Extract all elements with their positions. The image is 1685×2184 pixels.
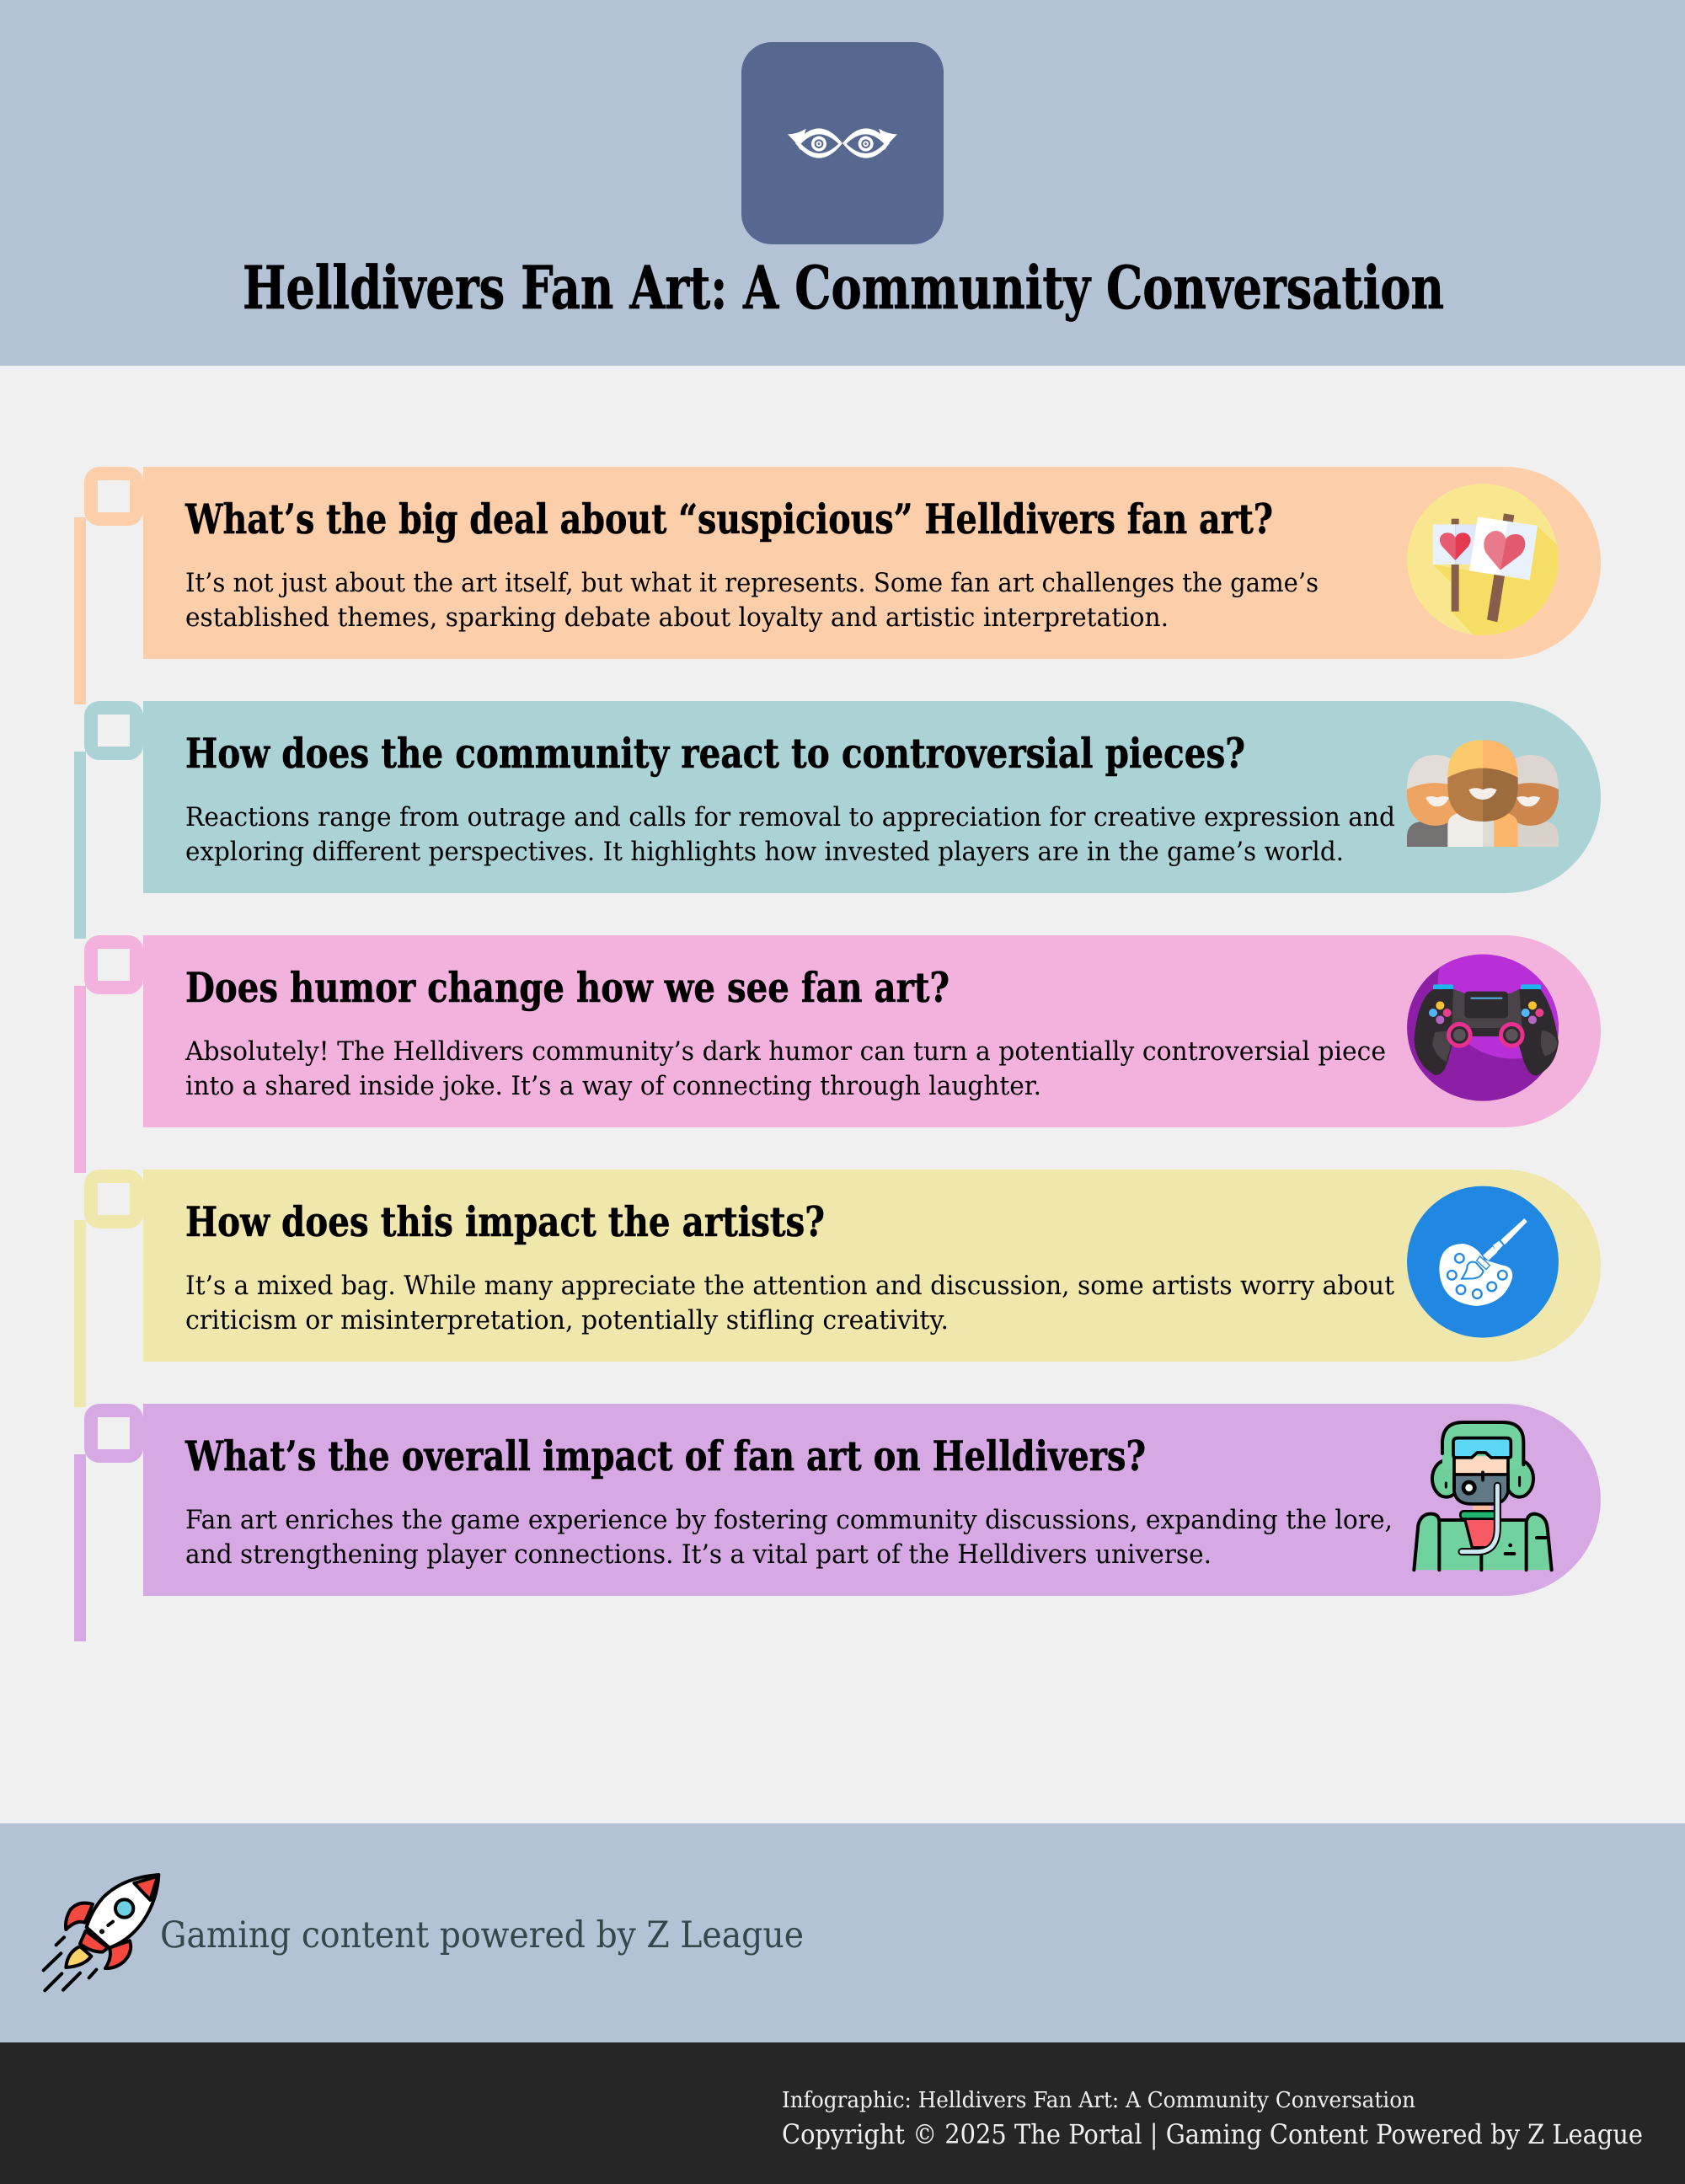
body text (185, 1505, 1393, 1570)
icon: paint palette and brush (1407, 1186, 1559, 1338)
panel: impact on artists (74, 1170, 1601, 1407)
infographic credit: Infographic: Helldivers Fan Art: A Community Conversation (782, 2088, 1415, 2113)
icon: group of people (1407, 740, 1559, 847)
body text: Reactions range from outrage and calls for removal to appreciation for creative expression and (185, 802, 1395, 832)
logo tile (741, 42, 944, 244)
body text: Absolutely! The Helldivers community’s dark humor can turn a potentially controversial piece (185, 1036, 1386, 1067)
body text: It’s not just about the art itself, but what it represents. Some fan art challenges the game’s (185, 568, 1319, 598)
icon: suspicious eyes (788, 128, 897, 158)
heading: What’s the overall impact of fan art on Helldivers? (185, 1432, 1146, 1480)
panel: overall impact (74, 1404, 1601, 1641)
body text: into a shared inside joke. It’s a way of connecting through laughter. (185, 1071, 1041, 1101)
header band (0, 0, 1685, 366)
footer band: copyright (0, 2042, 1685, 2184)
icon: helldiver soldier (1414, 1422, 1552, 1570)
body text: Fan art enriches the game experience by fostering community discussions, expanding the lore, (185, 1505, 1393, 1535)
heading: What’s the big deal about “suspicious” Helldivers fan art? (185, 495, 1273, 543)
body text: It’s a mixed bag. While many appreciate the attention and discussion, some artists worry about (185, 1271, 1395, 1301)
body text (185, 568, 1319, 633)
body text: criticism or misinterpretation, potentially stifling creativity. (185, 1305, 949, 1336)
icon: game controller (1407, 954, 1559, 1101)
body text: exploring different perspectives. It highlights how invested players are in the game’s world. (185, 837, 1344, 867)
footer band: powered by (0, 1823, 1685, 2042)
panel: humor (74, 935, 1601, 1173)
body text: and strengthening player connections. It’s a vital part of the Helldivers universe. (185, 1539, 1212, 1570)
icon: rocket (44, 1875, 158, 1990)
body text (185, 1271, 1395, 1336)
body text (185, 802, 1395, 867)
panel: suspicious fan art (74, 467, 1601, 704)
heading: Does humor change how we see fan art? (185, 963, 949, 1012)
body text: established themes, sparking debate about loyalty and artistic interpretation. (185, 602, 1169, 633)
heading: How does the community react to controversial pieces? (185, 729, 1245, 778)
body text (185, 1036, 1386, 1101)
powered by text: Gaming content powered by Z League (160, 1914, 804, 1956)
icon: protest signs with hearts (1407, 484, 1559, 635)
heading: How does this impact the artists? (185, 1197, 825, 1246)
panel: community reaction (74, 701, 1601, 939)
